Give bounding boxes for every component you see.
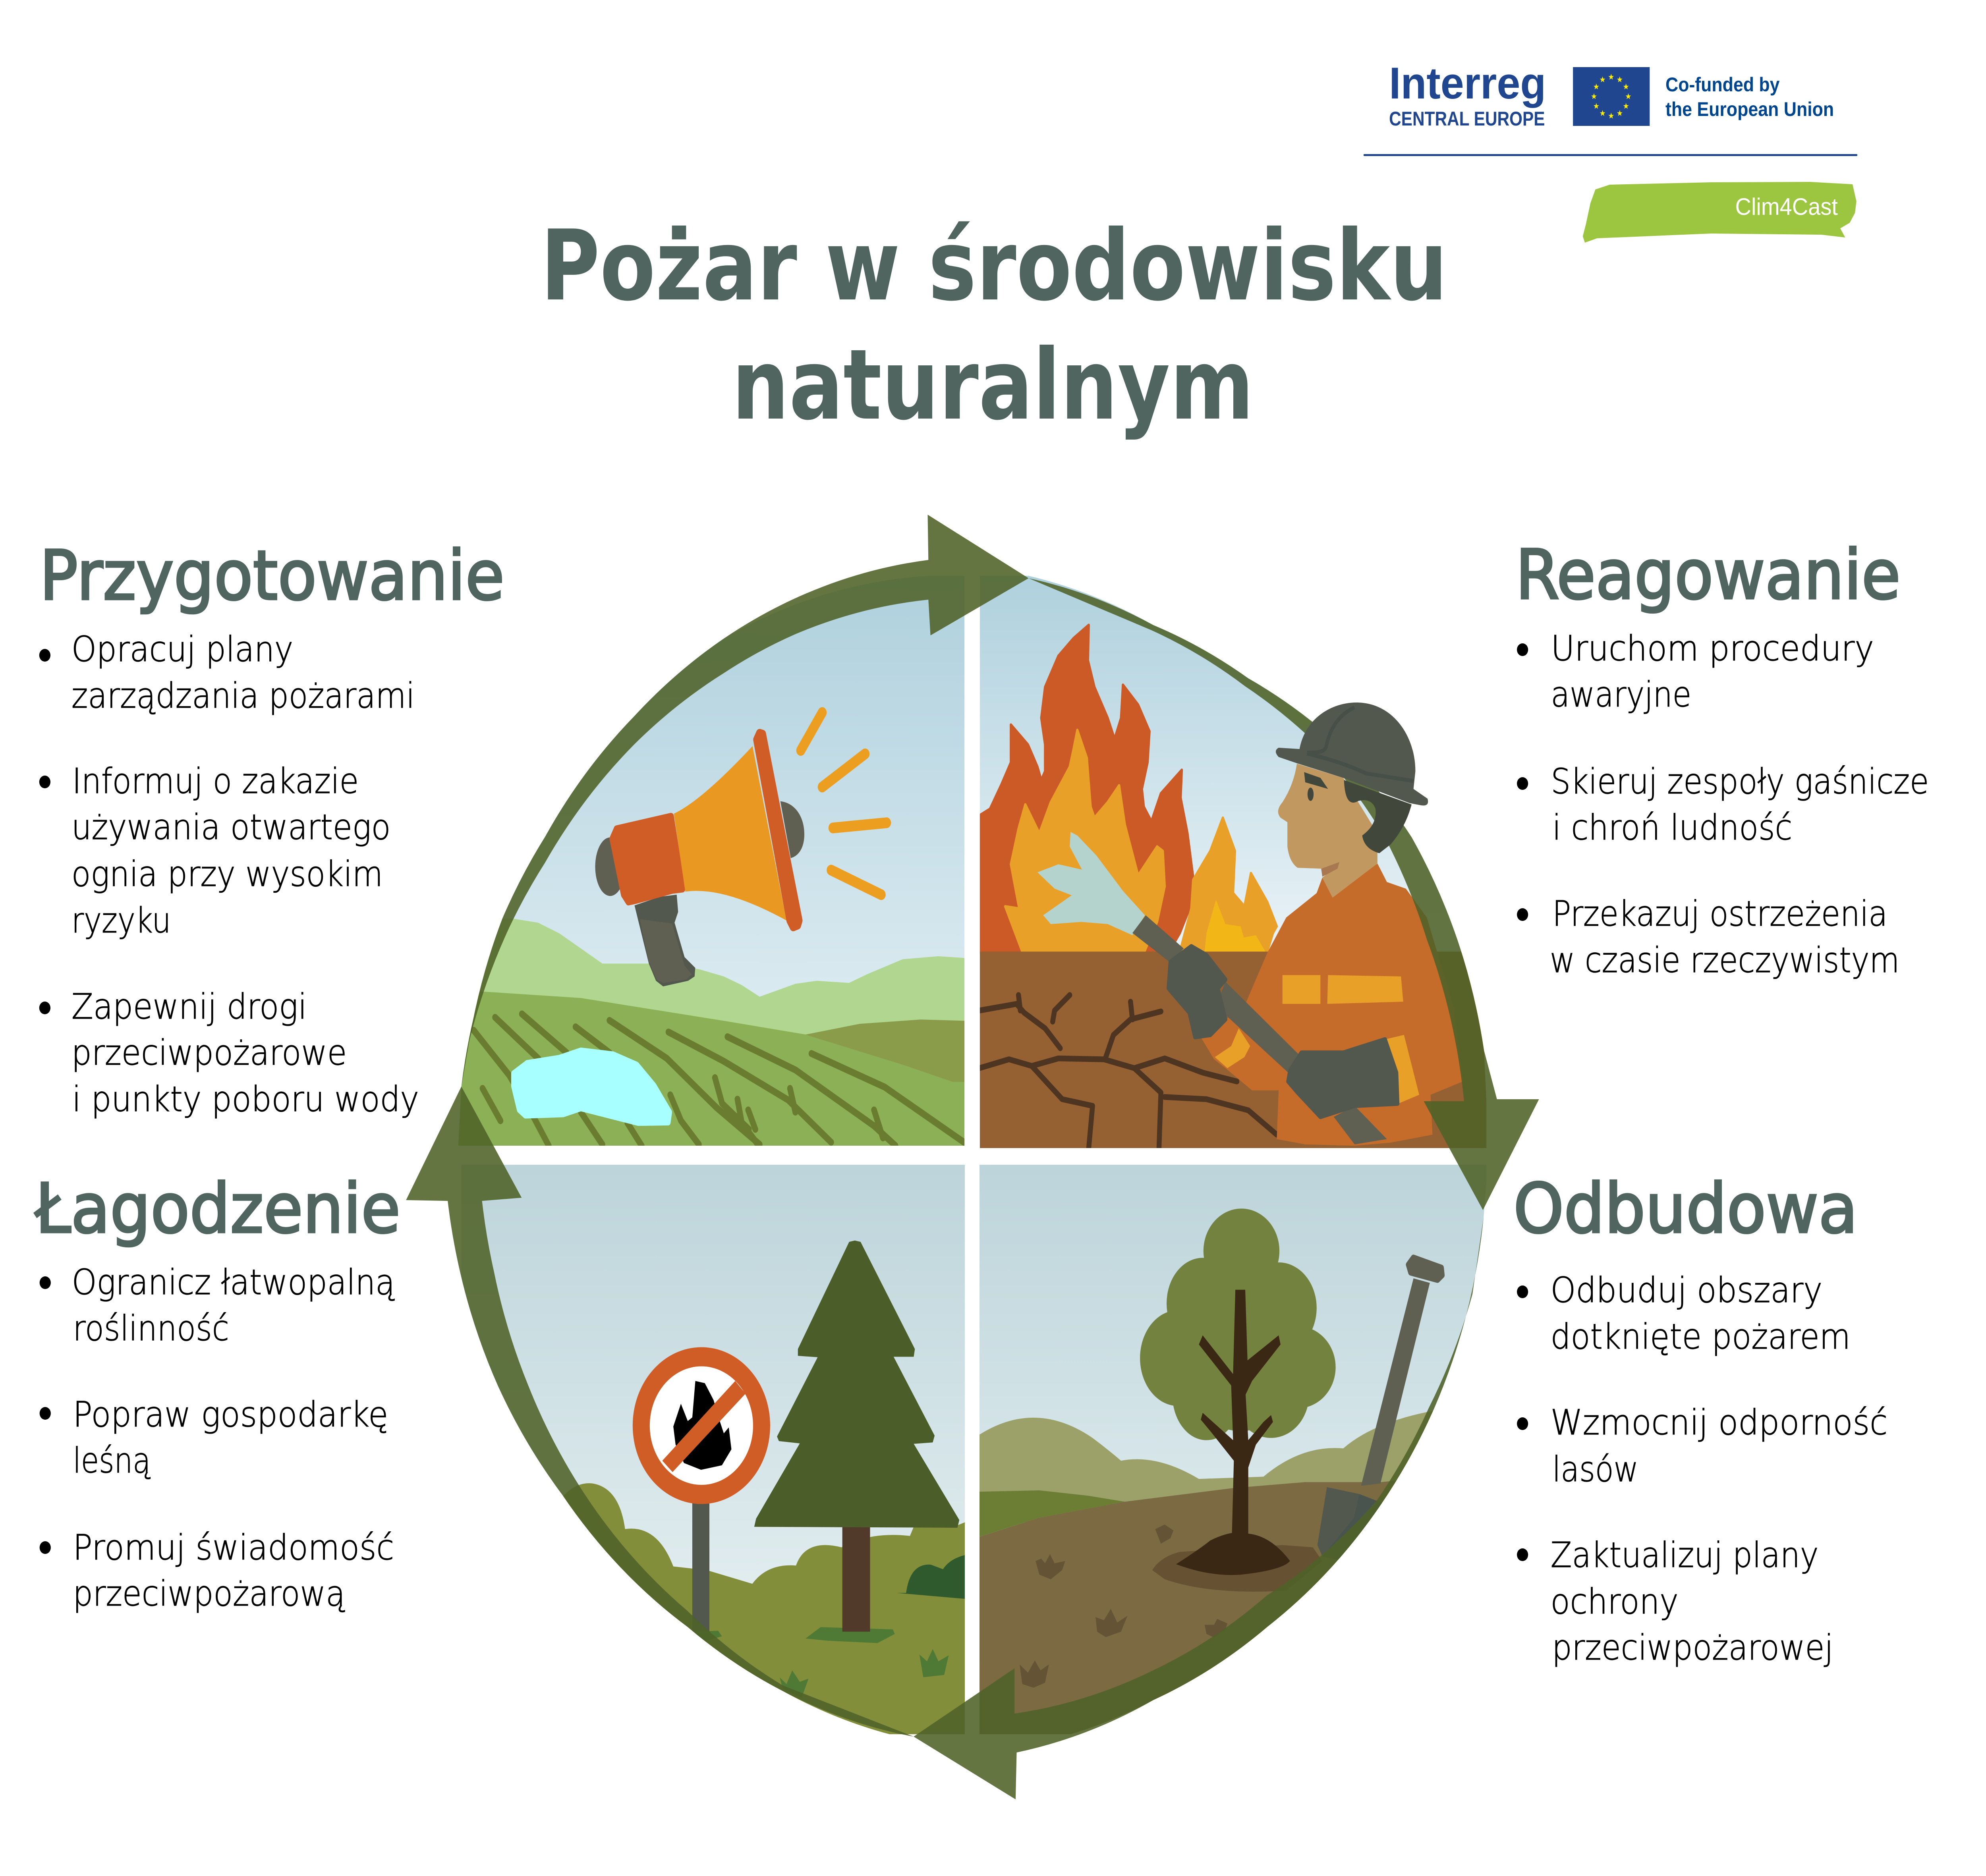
panel: preparation scene with megaphone (438, 574, 967, 1146)
header logos (1364, 58, 1857, 243)
list: Łagodzenie actions: przeciwpożarową (73, 1574, 345, 1614)
list: Odbudowa actions: Zaktualizuj plany (1551, 1535, 1818, 1575)
list: Łagodzenie actions: Popraw gospodarkę (73, 1395, 388, 1435)
logo: Interreg Central Europe (1389, 58, 1546, 130)
icon: shovel (1318, 1258, 1442, 1561)
list: Przygotowanie actions: Informuj o zakazie (72, 761, 359, 801)
title (541, 210, 1447, 442)
icon: megaphone (595, 733, 804, 986)
list: Odbudowa actions: lasów (1552, 1449, 1638, 1490)
list: Łagodzenie actions: Promuj świadomość (73, 1528, 394, 1568)
list: Łagodzenie actions: leśną (73, 1441, 151, 1481)
arrow: response to recovery (1029, 578, 1539, 1210)
water pond (514, 1050, 670, 1123)
list: Odbudowa actions: ochrony (1551, 1582, 1679, 1622)
list: Przygotowanie actions: przeciwpożarowe (71, 1033, 347, 1073)
list: Przygotowanie actions: Opracuj plany (71, 629, 293, 670)
firefighter head and helmet (1276, 703, 1428, 897)
icon: sound lines (801, 712, 887, 895)
furrows (473, 1014, 965, 1146)
list: Łagodzenie actions (40, 1262, 395, 1614)
heading: Reagowanie: Reagowanie (1515, 535, 1901, 615)
arrow: preparation to response (462, 515, 1029, 1087)
title: Pożar w środowisku (541, 210, 1447, 322)
panel: Łagodzenie text (34, 1169, 400, 1614)
list: Łagodzenie actions: Ogranicz łatwopalną (72, 1262, 395, 1303)
list: Przygotowanie actions (39, 629, 419, 1119)
arrow: recovery to mitigation (914, 1217, 1484, 1799)
list: Reagowanie actions: w czasie rzeczywistym (1550, 940, 1899, 980)
list: Przygotowanie actions: i punkty poboru wody (72, 1079, 419, 1119)
list: Odbudowa actions: przeciwpożarowej (1552, 1628, 1833, 1668)
title: naturalnym (732, 329, 1254, 442)
list: Reagowanie actions: Przekazuj ostrzeżenia (1552, 894, 1887, 934)
list: Odbudowa actions (1517, 1270, 1887, 1668)
list: Przygotowanie actions: zarządzania pożarami (71, 676, 415, 716)
heading: Przygotowanie: Przygotowanie (40, 536, 504, 616)
text: co-funded by the European Union: the European Union (1665, 98, 1834, 120)
list: Reagowanie actions: Skieruj zespoły gaśnicze (1551, 762, 1929, 802)
list: Przygotowanie actions: Zapewnij drogi (71, 987, 307, 1027)
icon: flames (979, 625, 1277, 953)
list: Przygotowanie actions: ognia przy wysokim (71, 854, 383, 894)
list: Odbudowa actions: Odbuduj obszary (1551, 1270, 1822, 1310)
icon: pine tree (754, 1241, 959, 1643)
panel: Przygotowanie text (39, 536, 504, 1119)
firefighter body (1132, 863, 1463, 1146)
logo: Interreg Central Europe: Interreg (1389, 58, 1546, 108)
text: co-funded by the European Union: Co-funded by (1665, 73, 1780, 96)
icon: EU flag (1573, 67, 1650, 126)
panel: mitigation scene with forest (441, 1162, 967, 1741)
logo: Interreg Central Europe: CENTRAL EUROPE (1389, 107, 1545, 130)
list: Przygotowanie actions: ryzyku (71, 901, 171, 941)
list: Łagodzenie actions: roślinność (73, 1309, 229, 1349)
no-fire sign (633, 1347, 770, 1641)
panel: recovery scene with tree planting (979, 1162, 1488, 1750)
panel: response scene with fire (979, 572, 1488, 1149)
badge: Clim4Cast brush stroke: Clim4Cast (1735, 193, 1838, 220)
list: Reagowanie actions: awaryjne (1551, 675, 1691, 715)
arrow: mitigation to preparation (406, 1087, 914, 1737)
text: co-funded by the European Union (1665, 73, 1834, 120)
list: Reagowanie actions: i chroń ludność (1552, 808, 1792, 848)
icon: young tree (1140, 1208, 1336, 1575)
list: Reagowanie actions: Uruchom procedury (1551, 629, 1874, 669)
badge: Clim4Cast brush stroke (1583, 182, 1857, 243)
water spray (1037, 832, 1145, 935)
list: Odbudowa actions: Wzmocnij odporność (1551, 1403, 1887, 1443)
cracked ground (979, 952, 1488, 1149)
heading: Łagodzenie: Łagodzenie (34, 1169, 400, 1249)
list: Przygotowanie actions: używania otwartego (71, 807, 390, 847)
arrows: cycle ring (406, 515, 1539, 1799)
heading: Odbudowa: Odbudowa (1513, 1169, 1858, 1249)
illustration: circular cycle of four scenes (438, 572, 1488, 1750)
panel: Reagowanie text (1515, 535, 1929, 980)
panel: Odbudowa text (1513, 1169, 1887, 1668)
list: Odbudowa actions: dotknięte pożarem (1551, 1317, 1851, 1357)
list: Reagowanie actions (1517, 629, 1929, 980)
